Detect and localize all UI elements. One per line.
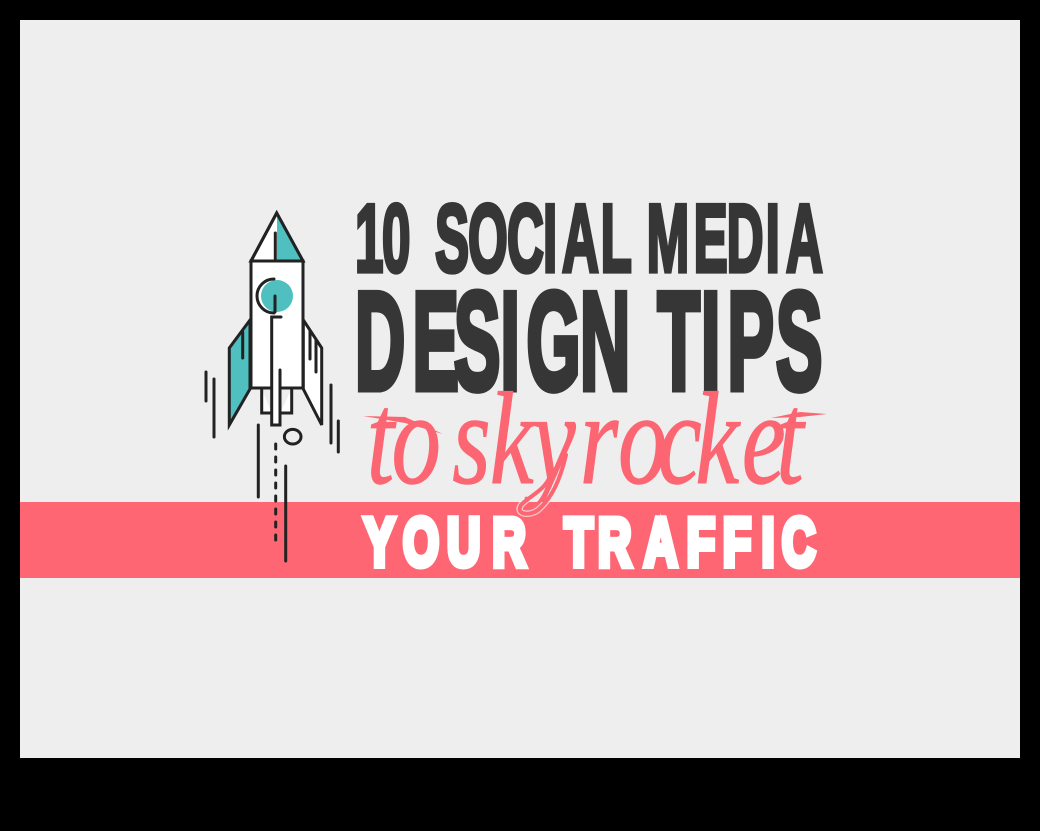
pink banner: [20, 502, 1020, 578]
rocket porthole: [257, 279, 293, 313]
rocket body: [251, 261, 303, 388]
script subtitle: to skyrocket: [367, 366, 806, 512]
rocket nozzle: [262, 317, 292, 425]
title line 2: DESIGN TIPS: [355, 265, 822, 419]
script flourish: y tail: [520, 455, 566, 514]
left fin: [229, 320, 250, 425]
script flourish: t crossbars: [363, 412, 827, 434]
right fin: [303, 320, 322, 425]
title line 1: 10 SOCIAL MEDIA: [355, 185, 823, 293]
icon: rocket: [206, 213, 338, 561]
rocket nose cone: [251, 213, 303, 261]
exhaust lines: [206, 372, 338, 561]
exhaust bubble: [284, 429, 301, 444]
banner text: YOUR TRAFFIC: [364, 504, 815, 581]
